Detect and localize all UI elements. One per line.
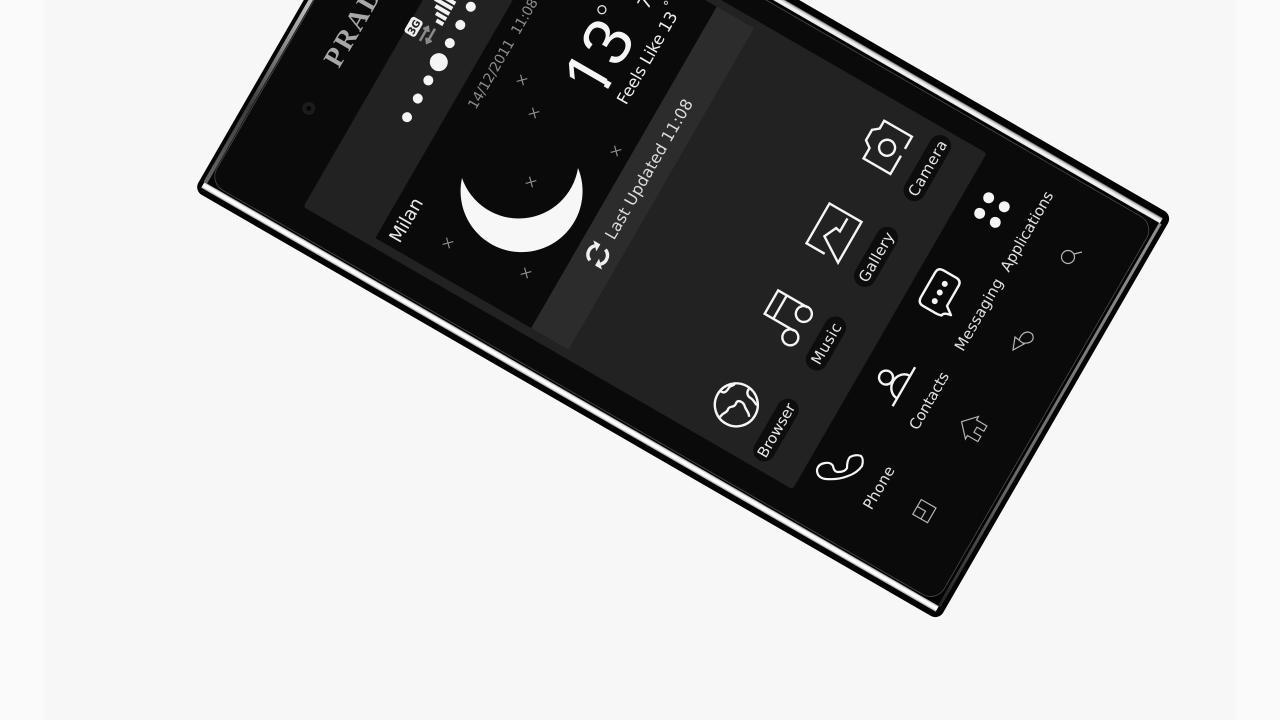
dock: applications	[956, 165, 1057, 275]
music label pill	[802, 312, 850, 375]
music label: Music	[807, 320, 846, 368]
gallery label: Gallery	[855, 229, 898, 285]
temperature	[568, 21, 632, 89]
camera label: Camera	[904, 137, 951, 200]
browser label pill	[749, 395, 803, 465]
browser label: Browser	[754, 399, 800, 461]
phone	[194, 0, 1172, 620]
contacts icon	[869, 354, 915, 406]
temperature: 1	[548, 39, 633, 109]
applications label: Applications	[997, 188, 1057, 275]
app: camera	[851, 103, 955, 205]
status badge 3G: 3G	[406, 18, 423, 37]
weather panel	[375, 0, 717, 328]
dock: messaging	[908, 250, 1007, 354]
right side white highlight strip	[427, 0, 1163, 223]
temperature: 3	[565, 7, 650, 77]
camera label pill	[900, 131, 955, 205]
app: music	[752, 284, 850, 375]
camera icon	[858, 118, 912, 174]
messaging label: Messaging	[951, 275, 1007, 354]
left side white highlight strip	[201, 182, 939, 612]
music icon	[757, 290, 815, 348]
updated bar	[531, 7, 754, 350]
moon	[461, 168, 583, 252]
gallery icon	[806, 203, 862, 263]
browser icon	[707, 375, 766, 434]
contacts label: Contacts	[905, 368, 953, 433]
refresh icon	[583, 240, 612, 270]
app: browser	[699, 366, 803, 465]
stars	[441, 73, 623, 280]
dock: phone label: Phone	[859, 463, 899, 513]
degree symbol	[596, 4, 607, 15]
updated text: Last Updated 11:08	[601, 96, 697, 243]
dock: phone icon	[817, 455, 863, 479]
nav icon: search	[1062, 250, 1082, 264]
app: gallery	[802, 195, 902, 291]
main screen panel	[303, 0, 987, 489]
feels like degree	[664, 1, 668, 5]
gallery label pill	[850, 223, 902, 291]
applications icon	[972, 190, 1012, 230]
top edge highlight	[204, 0, 428, 184]
nav icon: recents	[913, 500, 936, 523]
camera lens	[300, 99, 318, 117]
glass display	[209, 0, 1155, 602]
feels like: Feels Like 13	[613, 8, 682, 108]
phone body	[194, 0, 1172, 620]
bottom edge highlight	[938, 223, 1162, 607]
dock: contacts	[865, 345, 953, 433]
data arrows	[417, 24, 438, 46]
city label: Milan	[386, 194, 428, 246]
signal bars	[422, 0, 456, 26]
messaging icon	[918, 267, 968, 320]
nav icon: home	[955, 410, 989, 445]
page indicator dots	[397, 0, 481, 126]
status badge 3G	[403, 16, 424, 38]
nav icon: back	[1013, 332, 1033, 350]
